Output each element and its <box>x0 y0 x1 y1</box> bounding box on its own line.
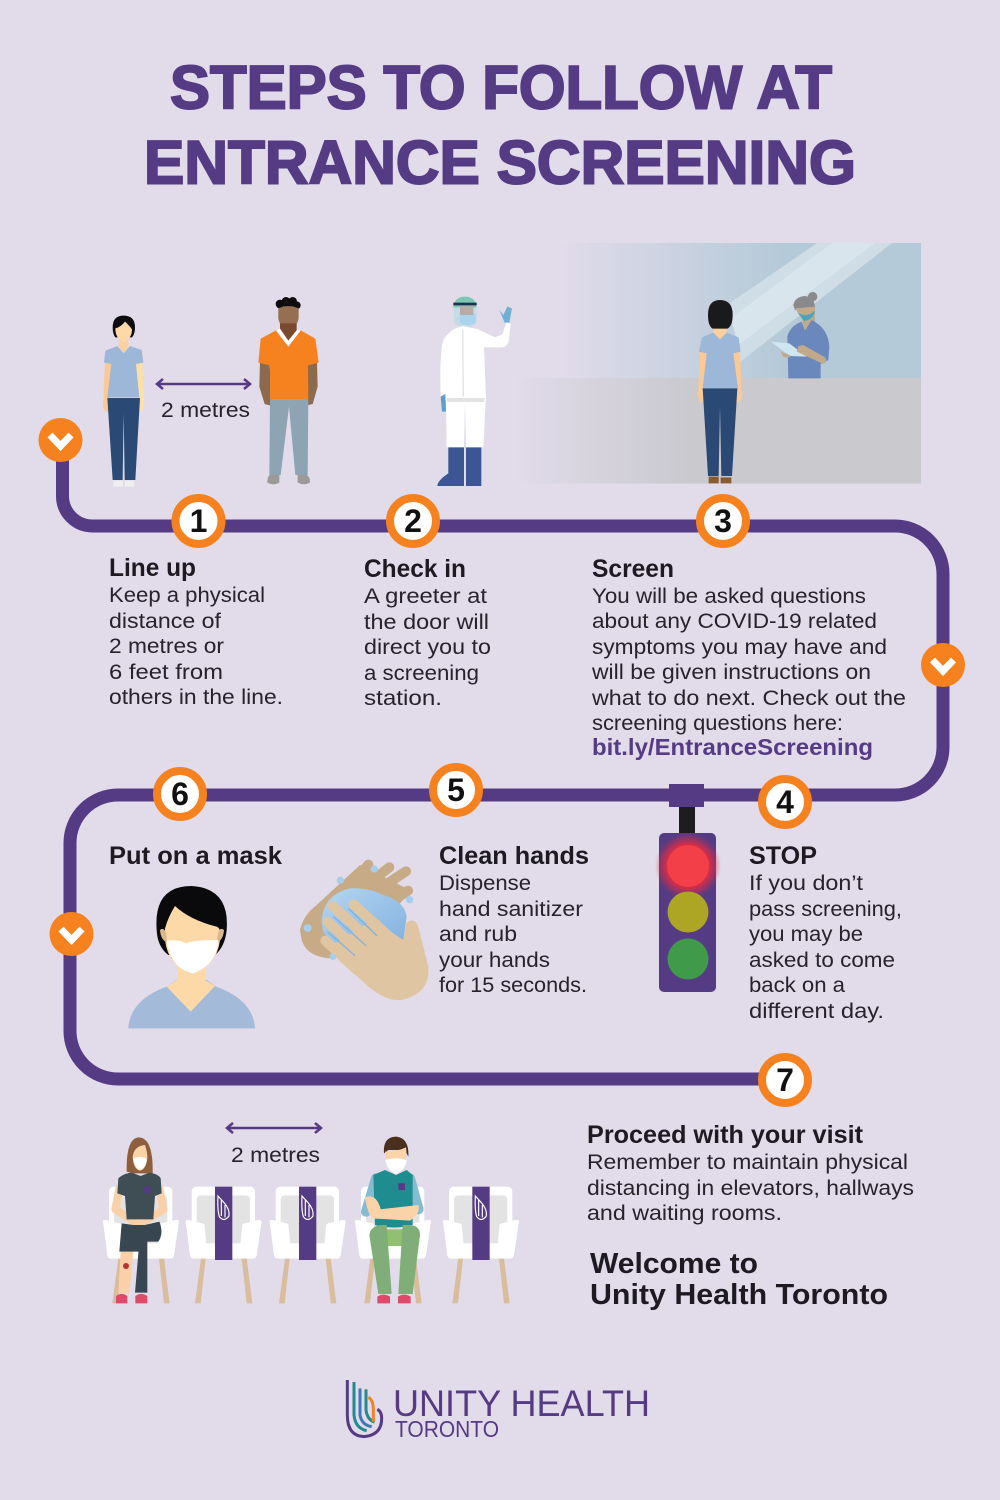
title: ENTRANCE SCREENING <box>144 128 856 196</box>
step number 7 <box>762 1057 808 1103</box>
step marker: chevron start <box>38 418 82 462</box>
title <box>144 54 856 196</box>
text: clean hands: and rub <box>439 923 517 946</box>
text: clean hands <box>439 842 589 997</box>
figure: man in orange <box>258 297 319 484</box>
figure: screener behind glass <box>771 292 829 378</box>
text: line up: 2 metres or <box>109 635 224 658</box>
chair with seated man <box>355 1137 431 1303</box>
text: check in: A greeter at <box>364 585 487 608</box>
figure: woman from behind <box>698 300 742 483</box>
text: screen: screening questions here: <box>592 712 843 735</box>
text: stop: If you don’t <box>749 872 863 895</box>
text: proceed with your visit: distancing in elevators, hallways <box>587 1177 914 1200</box>
step number 6 <box>157 771 203 817</box>
step number 3: 3 <box>714 503 732 539</box>
text: stop <box>749 842 902 1023</box>
text: clean hands: Clean hands <box>439 842 589 870</box>
text: proceed with your visit: Proceed with your visit <box>587 1121 864 1149</box>
icon: traffic light <box>655 784 721 992</box>
step number 1: 1 <box>190 503 207 539</box>
text: clean hands: Dispense <box>439 872 531 895</box>
text: stop: back on a <box>749 974 845 997</box>
text: welcome: Unity Health Toronto <box>590 1279 888 1311</box>
text: welcome: Welcome to <box>590 1248 758 1280</box>
label: 2 metres: 2 metres <box>161 399 250 422</box>
text: check in: Check in <box>364 555 466 583</box>
text: screen: symptoms you may have and <box>592 636 887 659</box>
step number 2: 2 <box>404 503 422 539</box>
text: screen: about any COVID-19 related <box>592 610 877 633</box>
step number 1 <box>176 498 222 544</box>
text: screen: Screen <box>592 555 674 583</box>
text: line up <box>109 554 283 709</box>
text: screen <box>591 555 906 760</box>
logo: Unity Health Toronto: TORONTO <box>395 1416 499 1442</box>
step number 4 <box>762 779 808 825</box>
text: line up: distance of <box>109 610 221 633</box>
text: screen: will be given instructions on <box>591 661 871 684</box>
logo: Unity Health Toronto <box>347 1380 650 1442</box>
text: check in: a screening <box>364 662 479 685</box>
text: clean hands: your hands <box>439 949 550 972</box>
step number 4: 4 <box>776 784 794 820</box>
text: line up: Line up <box>109 554 196 582</box>
text: welcome <box>590 1248 888 1311</box>
text: proceed with your visit <box>587 1121 914 1225</box>
step number 5 <box>433 767 479 813</box>
text: clean hands: hand sanitizer <box>439 898 583 921</box>
title: STEPS TO FOLLOW AT <box>170 54 832 122</box>
text: proceed with your visit: Remember to maintain physical <box>587 1151 908 1174</box>
text: stop: pass screening, <box>749 898 902 921</box>
text: stop: different day. <box>749 1000 884 1023</box>
text: screen: You will be asked questions <box>592 585 866 608</box>
text: stop: you may be <box>749 923 863 946</box>
text: line up: 6 feet from <box>109 661 223 684</box>
figure: woman in line <box>103 316 144 487</box>
screening scene background <box>515 243 921 484</box>
step number 7: 7 <box>776 1062 794 1098</box>
figure: greeter in protective suit <box>437 297 512 486</box>
text: line up: others in the line. <box>109 686 283 709</box>
logo: Unity Health Toronto: UNITY HEALTH <box>393 1383 650 1424</box>
text: screen: what to do next. Check out the <box>591 687 906 710</box>
label: 2 metres seating: 2 metres <box>231 1144 320 1167</box>
icon: woman wearing mask <box>128 886 255 1028</box>
empty chair with blocking band 2 <box>270 1187 346 1303</box>
text: stop: asked to come <box>749 949 895 972</box>
empty chair with blocking band 3 <box>443 1187 519 1303</box>
text: check in <box>364 555 491 710</box>
step number 2 <box>390 498 436 544</box>
text: check in: the door will <box>364 611 489 634</box>
step number 6: 6 <box>171 776 189 812</box>
illustration: waiting room chairs <box>103 1137 519 1303</box>
text: stop: STOP <box>749 842 817 870</box>
arrow: 2 metres seating <box>227 1123 321 1133</box>
text: screen: bit.ly/EntranceScreening <box>592 734 873 760</box>
text: line up: Keep a physical <box>109 584 265 607</box>
step marker: chevron right <box>921 643 965 687</box>
text: check in: direct you to <box>364 636 491 659</box>
empty chair with blocking band 1 <box>186 1187 262 1303</box>
process path <box>62 440 943 1079</box>
text: check in: station. <box>364 687 442 710</box>
icon: washing hands <box>300 865 429 1000</box>
chair with seated woman <box>103 1137 179 1303</box>
text: proceed with your visit: and waiting rooms. <box>587 1202 782 1225</box>
text: clean hands: for 15 seconds. <box>439 974 587 997</box>
step number 3 <box>700 498 746 544</box>
text: put on a mask: Put on a mask <box>109 842 282 870</box>
step number 5: 5 <box>447 772 465 808</box>
arrow: 2 metres <box>157 379 250 389</box>
step marker: chevron left <box>50 912 94 956</box>
logo mark <box>347 1380 382 1437</box>
